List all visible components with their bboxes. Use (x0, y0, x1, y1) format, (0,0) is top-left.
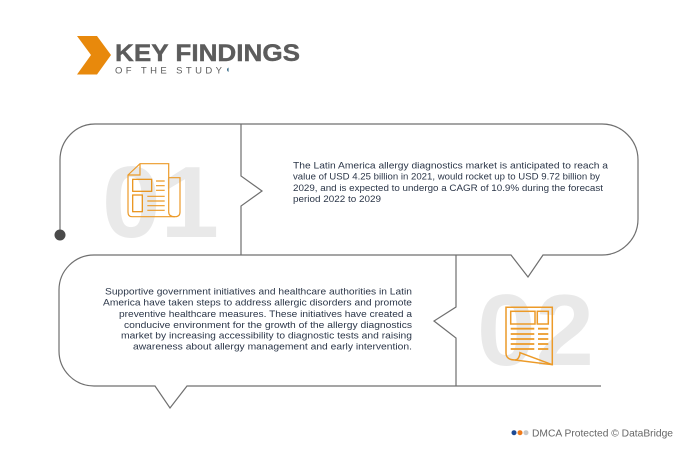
text block: finding 1: 2029, and is expected to undergo a CAGR of 10.9% during the forecast (293, 183, 603, 194)
icon: header chevron (77, 36, 111, 74)
text block: finding 2: Supportive government initiatives and healthcare authorities in Latin (105, 287, 412, 298)
speech bubble outline (59, 124, 638, 408)
subheading: of the study: OF THE STUDY (115, 66, 223, 76)
text block: finding 1 (293, 160, 609, 205)
text block: finding 2: preventive healthcare measures. These initiatives have created a (119, 309, 413, 320)
text block: finding 2: conducive environment for the growth of the allergy diagnostics (124, 320, 412, 331)
timeline dot (54, 230, 66, 240)
text block: finding 2 (103, 287, 413, 353)
icon: newspaper 02 (506, 307, 552, 365)
text block: finding 1: value of USD 4.25 billion in 2021, would rocket up to USD 9.72 billion by (293, 172, 600, 183)
text block: finding 1: period 2022 to 2029 (293, 194, 381, 205)
text block: finding 2: awareness about allergy management and early intervention. (133, 342, 412, 353)
icon: newspaper 01 (128, 164, 180, 217)
heading: key findings: KEY FINDINGS (115, 40, 300, 67)
text block: finding 2: market by increasing accessibility to diagnostic tests and raising (121, 331, 412, 342)
numeral 02: 02 (477, 275, 594, 387)
footer dots (512, 430, 528, 435)
decorative mark (227, 68, 228, 72)
text block: finding 1: The Latin America allergy diagnostics market is anticipated to reach a (293, 160, 609, 172)
footer credit: DMCA Protected © DataBridge (532, 428, 673, 440)
text block: finding 2: America have taken steps to address allergic disorders and promote (103, 298, 412, 309)
numeral 01: 01 (102, 147, 219, 259)
